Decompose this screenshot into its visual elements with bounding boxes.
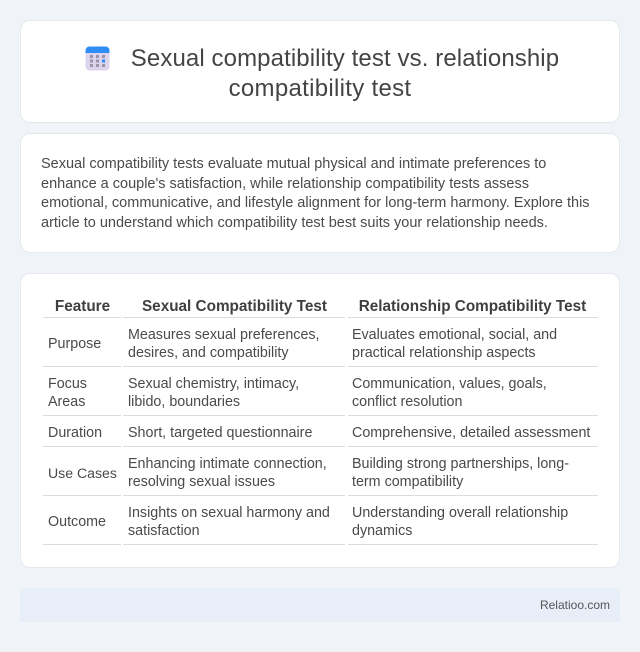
table header [55, 298, 586, 315]
row: Purpose: desires, and compatibility [128, 345, 289, 361]
row: Focus Areas: Communication, values, goals, [352, 376, 547, 392]
row: Use Cases: Building strong partnerships, long- [352, 456, 569, 472]
row: Duration: Short, targeted questionnaire [128, 425, 312, 441]
row: Use Cases: Enhancing intimate connection, [128, 456, 327, 472]
row: Outcome: satisfaction [128, 523, 200, 539]
panel: intro text [20, 133, 620, 253]
row: Duration: Duration [48, 425, 102, 441]
icon: calendar [86, 46, 110, 70]
title [131, 45, 559, 102]
text block: introduction [41, 156, 590, 230]
text block: introduction: enhance a couple's satisfaction, while relationship compatibility tests assess [41, 176, 529, 192]
table header: Sexual Compatibility Test [142, 298, 327, 315]
panel: title card [20, 20, 620, 123]
row: Use Cases: Use Cases [48, 465, 117, 481]
title: compatibility test [229, 75, 411, 102]
row: Focus Areas: conflict resolution [352, 394, 462, 410]
row: Outcome: Outcome [48, 514, 106, 530]
footer text: Relatioo.com [540, 598, 610, 612]
row: Outcome [48, 505, 568, 539]
text block: introduction: emotional, communicative, and lifestyle alignment for long-term harmony. Explore this [41, 195, 590, 211]
row: Purpose: Purpose [48, 336, 101, 352]
title: Sexual compatibility test vs. relationship [131, 45, 559, 72]
panel: comparison table [20, 273, 620, 568]
row: Purpose: practical relationship aspects [352, 345, 536, 361]
row: Focus Areas: Sexual chemistry, intimacy, [128, 376, 299, 392]
row: Use Cases: resolving sexual issues [128, 474, 275, 490]
row: Duration [48, 425, 590, 441]
row: Duration: Comprehensive, detailed assessment [352, 425, 590, 441]
row: Purpose: Evaluates emotional, social, and [352, 327, 557, 343]
row: Outcome: Understanding overall relationship [352, 505, 568, 521]
table header: Relationship Compatibility Test [359, 298, 586, 315]
text block: introduction: article to understand which compatibility test best suits your relationship needs. [41, 214, 548, 230]
row: Purpose [48, 327, 557, 361]
row: Use Cases [48, 456, 569, 490]
row: Purpose: Measures sexual preferences, [128, 327, 320, 343]
row: Focus Areas: libido, boundaries [128, 394, 240, 410]
row: Focus Areas: Areas [48, 394, 85, 410]
text block: introduction: Sexual compatibility tests evaluate mutual physical and intimate preferences to [41, 156, 546, 172]
row: Focus Areas [48, 376, 547, 410]
footer bar [20, 588, 620, 622]
row: Use Cases: term compatibility [352, 474, 463, 490]
row: Outcome: dynamics [352, 523, 412, 539]
table header: Feature [55, 298, 110, 315]
row: Focus Areas: Focus [48, 376, 87, 392]
row: Outcome: Insights on sexual harmony and [128, 505, 330, 521]
